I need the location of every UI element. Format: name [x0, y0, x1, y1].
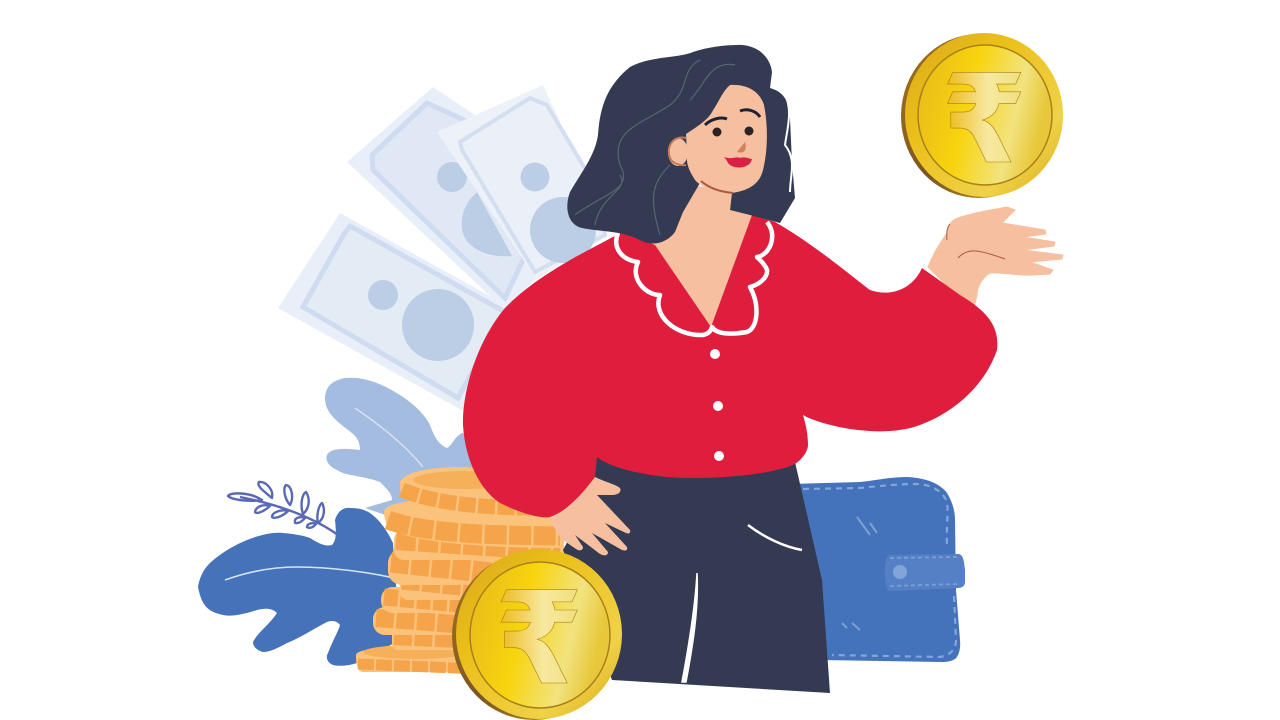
- woman: [463, 45, 1063, 693]
- banknote: lower: [278, 213, 515, 412]
- face: [686, 85, 767, 193]
- lips: [724, 157, 752, 168]
- jaw line: [701, 181, 733, 193]
- coin: floating: ₹: [941, 49, 1027, 192]
- leaf: dark blue: [198, 508, 403, 666]
- wallet clasp: [885, 554, 965, 591]
- coin: floating: [901, 33, 1063, 198]
- raised hand: [928, 207, 1063, 312]
- coin stack: [356, 467, 564, 672]
- wallet: [790, 477, 965, 662]
- coin: foreground: [452, 549, 622, 720]
- hair back: [567, 45, 795, 244]
- ear: [668, 138, 688, 166]
- hair strands: [575, 60, 735, 235]
- hand on hip: [550, 477, 630, 555]
- coin layer 2: [384, 498, 562, 548]
- leaf: light blue: [325, 378, 480, 520]
- white hair streak: [785, 95, 792, 192]
- blouse: [463, 215, 997, 517]
- trousers: [563, 455, 830, 693]
- eyebrows: [705, 110, 760, 125]
- coin layer 1: [400, 467, 545, 516]
- coin layer 6: [381, 587, 551, 613]
- blouse buttons: [710, 349, 724, 461]
- banknote: middle: [347, 87, 560, 310]
- leaf sprig: [228, 482, 338, 535]
- coin: foreground: ₹: [494, 565, 584, 714]
- neck and chest: [648, 185, 758, 336]
- panel: banknotes fan: [278, 85, 610, 412]
- collar: [616, 222, 772, 335]
- coin layer 5: [400, 575, 550, 600]
- coin layer 3: [394, 530, 564, 560]
- coin layer 8: [392, 628, 542, 650]
- banknote: upper: [437, 85, 610, 280]
- nose: [737, 142, 746, 153]
- coin layer 4: [388, 549, 558, 585]
- coin layer 7: [373, 607, 543, 635]
- eyes: [712, 128, 722, 136]
- coin layer 9: [356, 645, 560, 672]
